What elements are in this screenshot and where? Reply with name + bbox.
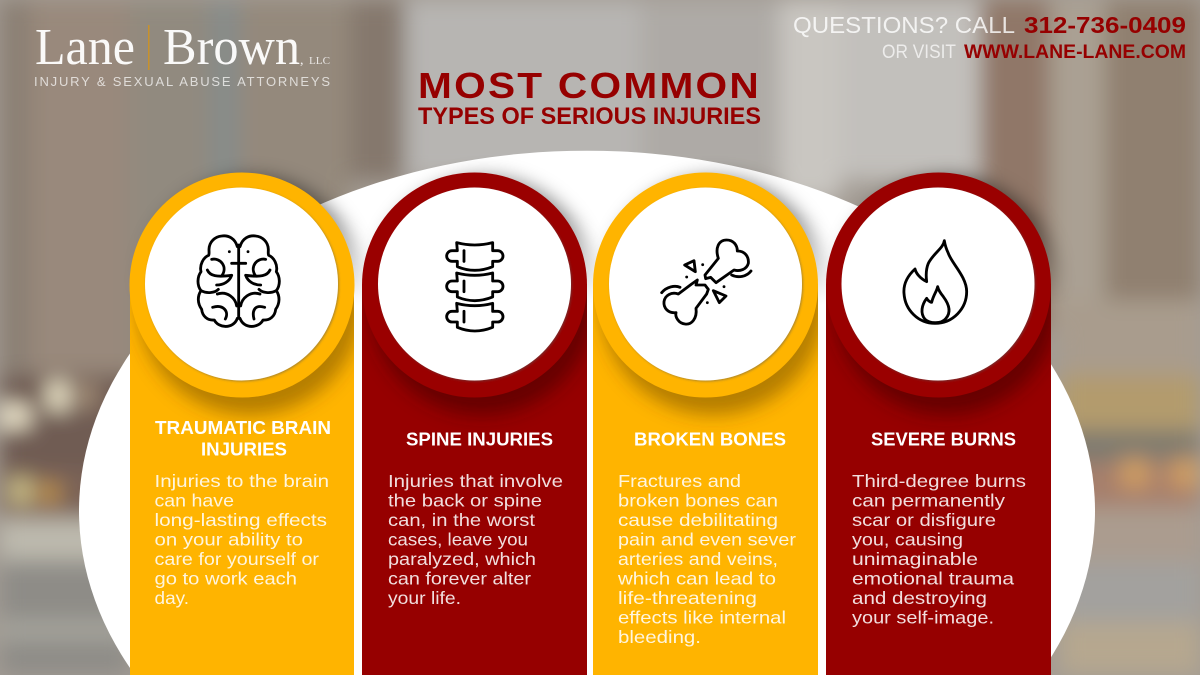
text: broken bones description: life-threatening <box>618 588 757 608</box>
heading: broken bones: BROKEN BONES <box>634 430 786 450</box>
contact information: OR VISIT <box>882 42 956 63</box>
title <box>418 65 761 130</box>
contact information: QUESTIONS? CALL <box>793 12 1015 38</box>
text: broken bones description: effects like internal <box>618 608 786 628</box>
icon: brain <box>198 236 279 326</box>
text: broken bones description: pain and even sever <box>618 530 796 550</box>
icon: broken bone <box>662 240 751 324</box>
logo: Lane Brown LLC: Lane <box>35 19 135 76</box>
heading: severe burns: SEVERE BURNS <box>871 430 1016 450</box>
title: MOST COMMON <box>418 65 761 106</box>
heading: traumatic brain injuries: TRAUMATIC BRAIN <box>155 418 331 438</box>
text: spine injury description: paralyzed, which <box>388 549 536 569</box>
text: brain injury description: can have <box>154 490 234 510</box>
text: severe burns description: emotional trauma <box>852 568 1014 588</box>
contact information <box>793 12 1186 63</box>
text: brain injury description: on your ability to <box>154 530 303 550</box>
text: spine injury description: can forever alter <box>388 568 531 588</box>
text: spine injury description: your life. <box>388 588 461 608</box>
text: spine injury description: Injuries that involve <box>388 471 563 491</box>
logo: Lane Brown LLC: Brown <box>163 19 300 76</box>
text: broken bones description: bleeding. <box>618 627 701 647</box>
panel: broken bones <box>593 172 825 675</box>
logo: Lane Brown LLC <box>34 19 330 89</box>
text: broken bones description: broken bones can <box>618 490 778 510</box>
text: brain injury description: care for yourself or <box>154 549 319 569</box>
icon: flame <box>904 241 967 323</box>
panel: severe burns <box>826 172 1058 675</box>
logo: Lane Brown LLC: INJURY & SEXUAL ABUSE ATTORNEYS <box>34 74 330 89</box>
icon: spine vertebrae <box>447 243 503 331</box>
text: severe burns description: unimaginable <box>852 549 978 569</box>
white ellipse backdrop <box>79 151 1095 675</box>
text: brain injury description: long-lasting effects <box>154 510 327 530</box>
text: brain injury description: day. <box>154 588 189 608</box>
text: broken bones description: cause debilitating <box>618 510 778 530</box>
text: broken bones description: arteries and veins, <box>618 549 778 569</box>
text: severe burns description <box>852 471 1026 628</box>
text: spine injury description: the back or spine <box>388 490 542 510</box>
contact information: WWW.LANE-LANE.COM <box>964 42 1186 63</box>
logo: Lane Brown LLC: LLC <box>309 55 330 67</box>
text: brain injury description: Injuries to the brain <box>154 471 329 491</box>
text: broken bones description: Fractures and <box>618 471 741 491</box>
logo: Lane Brown LLC: , <box>300 53 304 68</box>
text: spine injury description: can, in the worst <box>388 510 535 530</box>
text: severe burns description: Third-degree burns <box>852 471 1026 491</box>
text: brain injury description: go to work each <box>154 568 297 588</box>
panel: traumatic brain injuries <box>130 172 362 675</box>
text: severe burns description: can permanently <box>852 490 1005 510</box>
panel: spine injuries <box>362 172 594 675</box>
contact information: 312-736-0409 <box>1024 12 1186 38</box>
text: severe burns description: scar or disfigure <box>852 510 996 530</box>
text: severe burns description: your self-image. <box>852 608 994 628</box>
text: spine injury description <box>388 471 563 608</box>
text: severe burns description: you, causing <box>852 530 963 550</box>
heading: traumatic brain injuries <box>155 418 331 460</box>
title: TYPES OF SERIOUS INJURIES <box>418 103 761 130</box>
heading: spine injuries: SPINE INJURIES <box>406 430 553 450</box>
heading: traumatic brain injuries: INJURIES <box>201 440 287 460</box>
text: spine injury description: cases, leave you <box>388 530 528 550</box>
text: severe burns description: and destroying <box>852 588 987 608</box>
text: broken bones description: which can lead to <box>617 568 776 588</box>
text: brain injury description <box>154 471 329 608</box>
text: broken bones description <box>617 471 796 647</box>
